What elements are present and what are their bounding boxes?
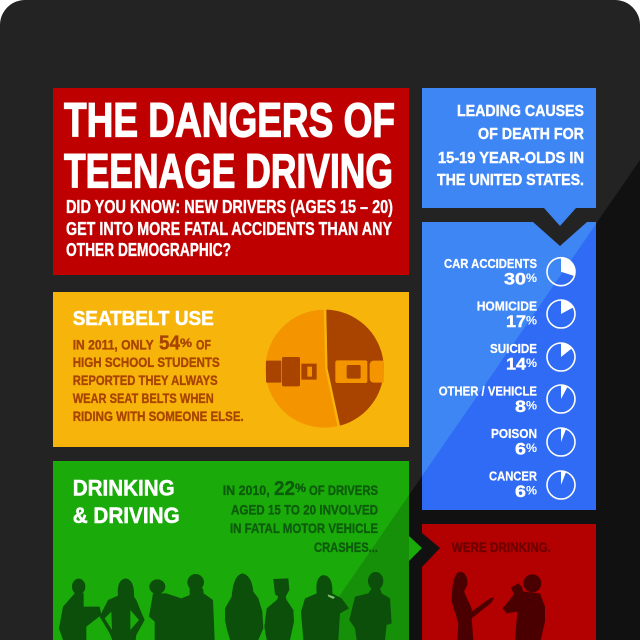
list item: suicide 14%: % bbox=[526, 356, 537, 370]
list item: suicide 14% bbox=[490, 341, 575, 374]
heading: the dangers of teenage driving bbox=[64, 94, 395, 198]
list item: other / vehicle 8%: 8 bbox=[515, 397, 526, 416]
list item: poison 6%: POISON bbox=[491, 426, 537, 441]
text block: seatbelt statistic: HIGH SCHOOL STUDENTS bbox=[73, 355, 220, 370]
heading: drinking and driving: & DRIVING bbox=[73, 503, 180, 528]
list item: car accidents 30%: 30 bbox=[504, 270, 526, 288]
panel: drinking and driving bbox=[53, 461, 422, 640]
text block: seatbelt statistic: REPORTED THEY ALWAYS bbox=[73, 373, 218, 388]
list item: other / vehicle 8%: % bbox=[526, 399, 537, 413]
text block: seatbelt statistic: RIDING WITH SOMEONE ELSE. bbox=[73, 409, 244, 424]
icon: two teens drinking silhouettes bbox=[452, 572, 545, 640]
list item: car accidents 30% bbox=[444, 256, 575, 288]
list item: suicide 14%: SUICIDE bbox=[490, 341, 537, 356]
text block: drinking statistic: % bbox=[295, 481, 306, 495]
list item: homicide 17%: % bbox=[526, 314, 537, 328]
text block: did you know: GET INTO MORE FATAL ACCIDENTS THAN ANY bbox=[66, 219, 392, 239]
text block: drinking statistic bbox=[223, 478, 378, 555]
list item: poison 6%: 6 bbox=[515, 440, 526, 458]
arrow: green pointer bbox=[409, 536, 422, 561]
heading: drinking and driving bbox=[73, 476, 180, 528]
list item: cancer 6%: 6 bbox=[515, 482, 526, 501]
heading: the dangers of teenage driving: TEENAGE DRIVING bbox=[64, 146, 393, 198]
list item: car accidents 30%: CAR ACCIDENTS bbox=[444, 256, 537, 271]
list item: cancer 6%: CANCER bbox=[489, 469, 538, 484]
panel: causes of death list bbox=[422, 222, 596, 510]
list item: cancer 6%: % bbox=[526, 484, 537, 498]
text block: drinking statistic: 22 bbox=[274, 478, 295, 500]
text block: did you know bbox=[66, 197, 393, 260]
list item: suicide 14%: 14 bbox=[506, 354, 527, 374]
text block: drinking statistic: IN FATAL MOTOR VEHICLE bbox=[230, 521, 378, 536]
list item: homicide 17%: HOMICIDE bbox=[477, 299, 537, 314]
list item: car accidents 30%: % bbox=[526, 271, 537, 285]
icon: crowd of teen silhouettes, left group bbox=[59, 574, 215, 640]
text block: leading causes of death: LEADING CAUSES bbox=[457, 103, 584, 120]
text block: leading causes of death bbox=[437, 103, 584, 189]
text block: leading causes of death: THE UNITED STATES. bbox=[437, 172, 584, 189]
text block: seatbelt statistic: WEAR SEAT BELTS WHEN bbox=[73, 391, 214, 406]
heading: seatbelt use: SEATBELT USE bbox=[73, 308, 214, 330]
list item: poison 6%: % bbox=[526, 441, 537, 455]
heading: drinking and driving: DRINKING bbox=[73, 476, 175, 500]
panel: seatbelt use bbox=[53, 292, 409, 447]
text block: did you know: OTHER DEMOGRAPHIC? bbox=[66, 240, 231, 260]
text block: seatbelt statistic: % bbox=[180, 336, 192, 350]
chart: seatbelt pie with buckle bbox=[265, 308, 384, 428]
text block: drinking statistic: IN 2010, bbox=[223, 483, 270, 498]
panel: title bbox=[53, 88, 409, 275]
list item: other / vehicle 8% bbox=[439, 384, 575, 416]
text block: were drinking: WERE DRINKING. bbox=[452, 540, 551, 555]
list item: other / vehicle 8%: OTHER / VEHICLE bbox=[439, 384, 537, 399]
text block: drinking statistic: AGED 15 TO 20 INVOLVED bbox=[231, 502, 378, 517]
text block: did you know: DID YOU KNOW: NEW DRIVERS (AGES 15 – 20) bbox=[66, 197, 393, 217]
text block: drinking statistic: CRASHES... bbox=[314, 540, 378, 555]
text block: seatbelt statistic: OF bbox=[196, 338, 211, 352]
list item: homicide 17% bbox=[477, 299, 575, 331]
list item: homicide 17%: 17 bbox=[506, 312, 526, 331]
text block: drinking statistic: OF DRIVERS bbox=[309, 483, 378, 498]
text block: seatbelt statistic: IN 2011, ONLY bbox=[73, 338, 154, 352]
text block: leading causes of death: 15-19 YEAR-OLDS IN bbox=[438, 150, 584, 167]
text block: seatbelt statistic bbox=[73, 332, 244, 424]
text block: seatbelt statistic: 54 bbox=[159, 332, 181, 354]
panel: were drinking bbox=[422, 524, 596, 640]
text block: leading causes of death: OF DEATH FOR bbox=[478, 126, 584, 143]
panel: leading causes heading bbox=[422, 88, 596, 226]
list item: cancer 6% bbox=[489, 469, 575, 501]
icon: crowd of teen silhouettes, right group bbox=[225, 572, 392, 640]
list item: poison 6% bbox=[491, 426, 575, 458]
heading: the dangers of teenage driving: THE DANGERS OF bbox=[64, 94, 395, 148]
